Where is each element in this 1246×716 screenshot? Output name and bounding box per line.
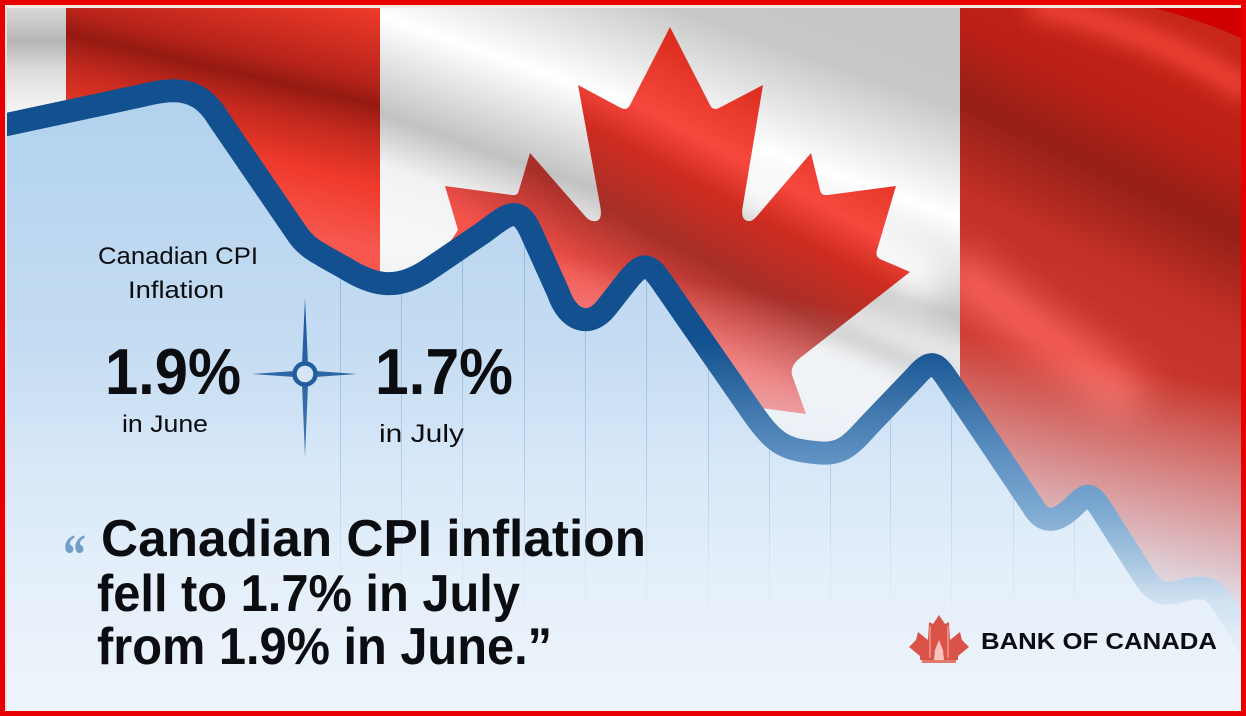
- heading: Canadian CPI Inflation: Canadian CPI: [98, 243, 258, 270]
- logo wordmark: BANK OF CANADA: [981, 628, 1217, 654]
- stat: June value: [105, 335, 241, 438]
- heading: Canadian CPI Inflation: Inflation: [128, 277, 224, 304]
- quote text: Canadian CPI inflation: [101, 510, 646, 568]
- chart grid lines: [340, 244, 1075, 594]
- stat: June value: in June: [122, 411, 208, 438]
- flag: centre white field: [380, 8, 960, 440]
- flag fade into background: [558, 263, 1241, 611]
- quote text: fell to 1.7% in July: [97, 565, 520, 623]
- stat: July value: 1.7%: [375, 335, 513, 408]
- icon: logo maple leaf: [909, 615, 969, 663]
- flag: right red bar: [960, 8, 1241, 610]
- stat: July value: in July: [379, 420, 465, 448]
- flag: left white strip: [7, 8, 66, 112]
- quote text: from 1.9% in June.”: [97, 618, 552, 676]
- quote text: [97, 510, 646, 676]
- icon: maple leaf: [430, 27, 910, 414]
- chart line: falling inflation: [0, 91, 1246, 647]
- stat: July value: [375, 335, 513, 448]
- heading: Canadian CPI Inflation: [98, 243, 258, 304]
- icon: compass star divider: [252, 298, 357, 457]
- logo: Bank of Canada: [909, 615, 1217, 663]
- quote mark: “: [63, 522, 86, 587]
- stat: June value: 1.9%: [105, 335, 241, 408]
- flag: left red bar: [66, 8, 380, 272]
